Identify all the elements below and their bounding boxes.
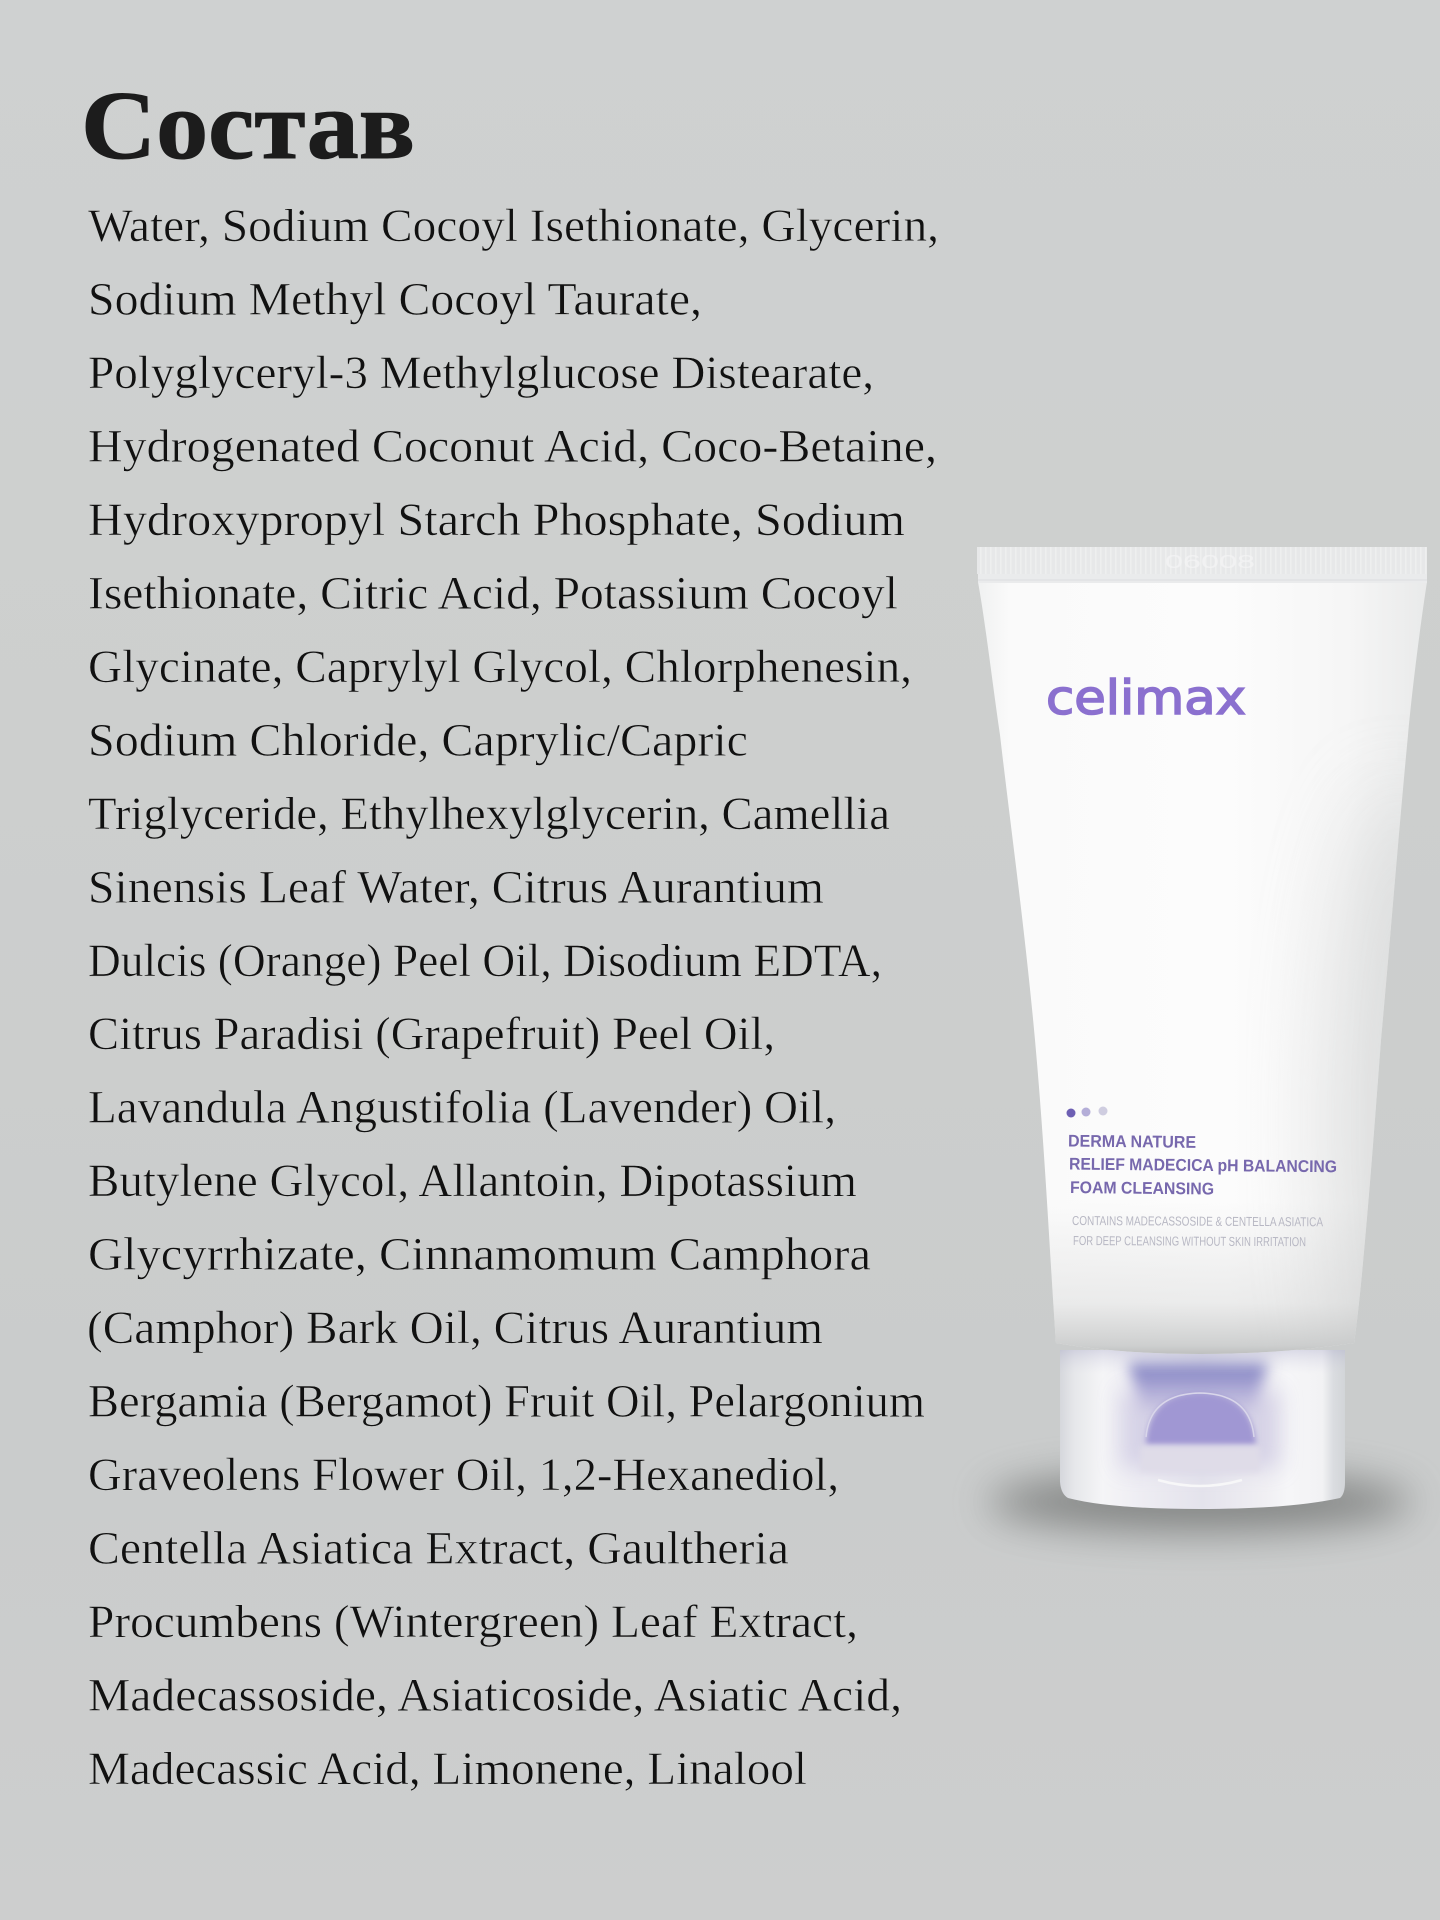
product name: FOAM CLEANSING bbox=[1070, 1178, 1214, 1199]
product name bbox=[1068, 1132, 1337, 1199]
ingredients text block: Glycyrrhizate, Cinnamomum Camphora bbox=[88, 1229, 871, 1281]
product description: CONTAINS MADECASSOSIDE & CENTELLA ASIATICA bbox=[1072, 1213, 1323, 1229]
ingredients text block: Glycinate, Caprylyl Glycol, Chlorphenesin, bbox=[88, 641, 912, 693]
ingredients text block: Madecassic Acid, Limonene, Linalool bbox=[88, 1743, 807, 1795]
tube crimped top bbox=[977, 547, 1427, 583]
product: cleansing foam tube bbox=[970, 547, 1440, 1532]
ingredients text block: Sinensis Leaf Water, Citrus Aurantium bbox=[88, 861, 824, 913]
product dots bbox=[1066, 1106, 1108, 1118]
ingredients text block: Citrus Paradisi (Grapefruit) Peel Oil, bbox=[88, 1008, 775, 1060]
product description: FOR DEEP CLEANSING WITHOUT SKIN IRRITATION bbox=[1073, 1233, 1306, 1249]
ingredients text block: (Camphor) Bark Oil, Citrus Aurantium bbox=[87, 1302, 823, 1354]
product name: DERMA NATURE bbox=[1068, 1132, 1196, 1152]
ingredients text block: Centella Asiatica Extract, Gaultheria bbox=[88, 1523, 789, 1575]
ingredients text block: Polyglyceryl-3 Methylglucose Distearate, bbox=[88, 347, 874, 399]
product name: RELIEF MADECICA pH BALANCING bbox=[1069, 1155, 1337, 1176]
ingredients text block: Sodium Methyl Cocoyl Taurate, bbox=[88, 274, 702, 326]
ingredients text block: Dulcis (Orange) Peel Oil, Disodium EDTA, bbox=[88, 935, 882, 987]
ingredients text block: Bergamia (Bergamot) Fruit Oil, Pelargonium bbox=[88, 1376, 925, 1428]
product description bbox=[1072, 1213, 1323, 1249]
ingredients text block: Sodium Chloride, Caprylic/Capric bbox=[88, 714, 748, 766]
ingredients text block: Butylene Glycol, Allantoin, Dipotassium bbox=[88, 1155, 857, 1207]
ingredients text block: Procumbens (Wintergreen) Leaf Extract, bbox=[88, 1596, 858, 1648]
tube cap bbox=[1060, 1350, 1345, 1510]
ingredients text block: Graveolens Flower Oil, 1,2-Hexanediol, bbox=[88, 1449, 839, 1501]
ingredients text block: Lavandula Angustifolia (Lavender) Oil, bbox=[88, 1082, 836, 1134]
ingredients text block: Triglyceride, Ethylhexylglycerin, Camellia bbox=[88, 788, 890, 840]
tube crimped top: 06008 bbox=[1165, 552, 1255, 572]
ingredients text block: Water, Sodium Cocoyl Isethionate, Glycerin, bbox=[88, 200, 939, 252]
tube body bbox=[978, 583, 1427, 1354]
title: Состав bbox=[81, 72, 415, 180]
brand logo: celimax bbox=[1046, 671, 1246, 726]
floor shadow bbox=[988, 1472, 1412, 1532]
ingredients text block: Madecassoside, Asiaticoside, Asiatic Acid, bbox=[88, 1670, 902, 1722]
ingredients text block bbox=[87, 200, 939, 1795]
ingredients text block: Hydrogenated Coconut Acid, Coco-Betaine, bbox=[88, 420, 937, 472]
ingredients text block: Isethionate, Citric Acid, Potassium Cocoyl bbox=[88, 567, 898, 619]
ingredients text block: Hydroxypropyl Starch Phosphate, Sodium bbox=[88, 494, 905, 546]
